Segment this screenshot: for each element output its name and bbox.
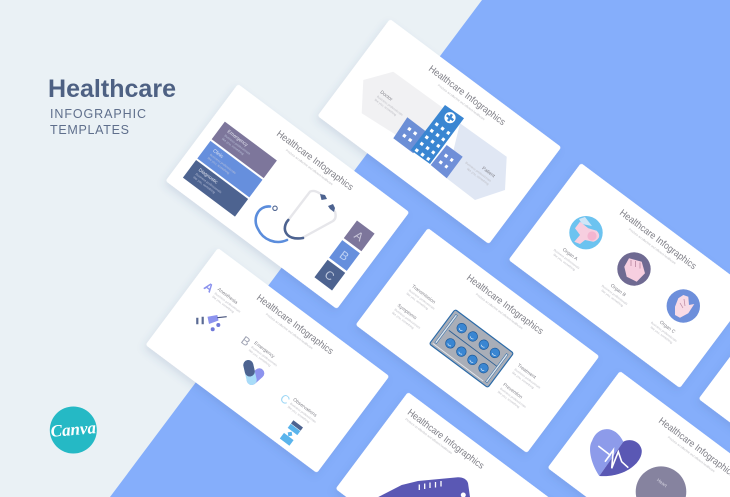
stacked bars and letter blocks: Business professionals bbox=[223, 134, 252, 156]
stacked bars and letter blocks: Emergency bbox=[226, 129, 249, 149]
icon: stethoscope bbox=[256, 191, 336, 242]
icon: thermometer bbox=[378, 477, 470, 497]
stacked bars and letter blocks bbox=[182, 99, 391, 290]
slide text: Business professionals bbox=[376, 95, 404, 117]
stacked bars and letter blocks: like you, something bbox=[207, 156, 231, 175]
slide text and blister pack: Treatment bbox=[516, 363, 537, 381]
slide text: Organ B bbox=[609, 283, 627, 298]
slide text bbox=[175, 263, 359, 428]
card body bbox=[356, 228, 599, 453]
slide text: like you, something bbox=[287, 405, 311, 424]
icon: Canva logo bbox=[50, 406, 97, 454]
panel: list slide with icons bbox=[146, 248, 389, 473]
slide text: Patient bbox=[480, 166, 497, 180]
slide text and blister pack: like you, something bbox=[497, 390, 521, 409]
slide text: Business professionals bbox=[650, 321, 678, 343]
callout: heart circle: Heart bbox=[656, 477, 668, 489]
stacked bars and letter blocks: like you, something bbox=[192, 175, 216, 194]
stacked bars and letter blocks: Produce an effective and efficient healthcare bbox=[285, 148, 334, 186]
card body bbox=[336, 392, 579, 497]
icon: capsules bbox=[248, 365, 259, 380]
slide text and blister pack: Prevention bbox=[502, 382, 524, 401]
slide text: Business professionals bbox=[214, 292, 242, 314]
panel: partial slide at right edge bbox=[699, 302, 730, 497]
right light blue shape bbox=[447, 123, 507, 200]
slide text and blister pack: Healthcare Infographics bbox=[464, 273, 545, 337]
card body bbox=[318, 19, 561, 244]
panel: organs slide bbox=[509, 163, 730, 388]
slide text: Healthcare Infographics bbox=[254, 293, 335, 357]
slide text: Organ C bbox=[658, 320, 677, 336]
stacked bars and letter blocks: A bbox=[351, 228, 366, 244]
icon: organ A bbox=[569, 216, 603, 249]
slide text: Business professionals bbox=[250, 345, 278, 368]
icon: organ C bbox=[667, 289, 700, 323]
slide text: like you, something bbox=[466, 167, 490, 186]
slide text: Produce an effective and efficient healthcare bbox=[628, 227, 677, 265]
slide text and blister pack: Business professionals bbox=[514, 367, 542, 390]
slide text: Business professionals bbox=[601, 284, 629, 306]
card body bbox=[166, 84, 409, 309]
subheading: infographic templates: INFOGRAPHIC bbox=[50, 107, 146, 121]
slide text bbox=[374, 49, 527, 186]
slide text: Produce an effective and efficient healthcare bbox=[404, 417, 453, 455]
panel: pill pack slide bbox=[356, 228, 599, 453]
slide text bbox=[550, 189, 722, 346]
slide text and blister pack: like you, something bbox=[511, 371, 535, 390]
slide text: Business professionals bbox=[553, 248, 581, 270]
slide text: Emergency bbox=[253, 340, 276, 360]
stacked bars and letter blocks: B bbox=[337, 248, 352, 264]
slide text: Healthcare Infographics bbox=[426, 64, 507, 128]
slide text and blister pack: Business professionals bbox=[499, 387, 527, 409]
icon: hospital building bbox=[393, 105, 464, 178]
subheading: infographic templates bbox=[50, 107, 146, 137]
slide text: like you, something bbox=[211, 295, 235, 314]
icon: heart with pulse bbox=[590, 429, 642, 476]
subheading: infographic templates: TEMPLATES bbox=[50, 123, 129, 137]
stacked bars and letter blocks: like you, something bbox=[221, 137, 245, 156]
stacked bars and letter blocks: Clinic bbox=[211, 148, 225, 160]
callout: heart circle bbox=[636, 466, 686, 497]
slide text: A bbox=[201, 279, 217, 296]
slide text: Produce an effective and efficient healthcare bbox=[437, 83, 486, 121]
panel: hospital slide bbox=[318, 19, 561, 244]
stacked bars and letter blocks: Healthcare Infographics bbox=[274, 129, 355, 193]
stacked bars and letter blocks: Diagnostic bbox=[197, 167, 219, 186]
slide text and blister pack bbox=[391, 249, 571, 413]
slide text and blister pack: Symptoms bbox=[396, 303, 418, 322]
slide text: Business professionals bbox=[289, 402, 317, 424]
slide text: Healthcare Infographics bbox=[617, 208, 698, 272]
card body bbox=[509, 163, 730, 388]
stacked bars and letter blocks: Business professionals bbox=[195, 172, 223, 194]
slide text: like you, something bbox=[248, 348, 272, 368]
slide text: Produce an effective and efficient healthcare bbox=[265, 312, 314, 350]
card body bbox=[146, 248, 389, 473]
panel: stethoscope slide bbox=[166, 84, 409, 309]
slide text: Anesthesia bbox=[216, 287, 239, 306]
icon: medicine bottle bbox=[280, 420, 303, 446]
slide text and blister pack: Transmission bbox=[410, 284, 437, 306]
slide text: like you, something bbox=[552, 253, 576, 272]
slide text: Healthcare Infographics bbox=[405, 407, 486, 472]
panel: thermometer slide bbox=[336, 392, 579, 497]
icon: Canva logo: Canva bbox=[50, 418, 97, 441]
slide text: Organ A bbox=[561, 247, 579, 263]
panel: heart slide bbox=[548, 371, 730, 497]
slide text and blister pack: Business professionals bbox=[408, 288, 436, 311]
left gray shape bbox=[362, 72, 448, 150]
heading: Healthcare: Healthcare bbox=[48, 75, 176, 103]
slide text: C bbox=[277, 391, 293, 408]
stacked bars and letter blocks: C bbox=[322, 267, 337, 284]
slide text and blister pack: like you, something bbox=[405, 292, 429, 311]
slide text and blister pack: like you, something bbox=[391, 311, 415, 330]
slide text: Produce an effective and efficient healthcare bbox=[667, 435, 716, 473]
slide text: B bbox=[238, 333, 253, 349]
card body bbox=[548, 371, 730, 497]
slide text: Business professionals bbox=[464, 161, 492, 183]
icon: syringe bbox=[197, 315, 227, 331]
slide text: like you, something bbox=[650, 325, 674, 345]
slide text and blister pack: Business professionals bbox=[394, 308, 422, 330]
slide text: Doctor bbox=[379, 89, 394, 103]
stacked bars and letter blocks: Business professionals bbox=[209, 153, 237, 175]
slide text: Observations bbox=[292, 397, 318, 419]
slide text: like you, something bbox=[600, 289, 624, 308]
slide text and blister pack: Produce an effective and efficient healthcare bbox=[475, 292, 524, 330]
icon: organ B bbox=[617, 252, 651, 286]
slide text: like you, something bbox=[374, 98, 397, 117]
